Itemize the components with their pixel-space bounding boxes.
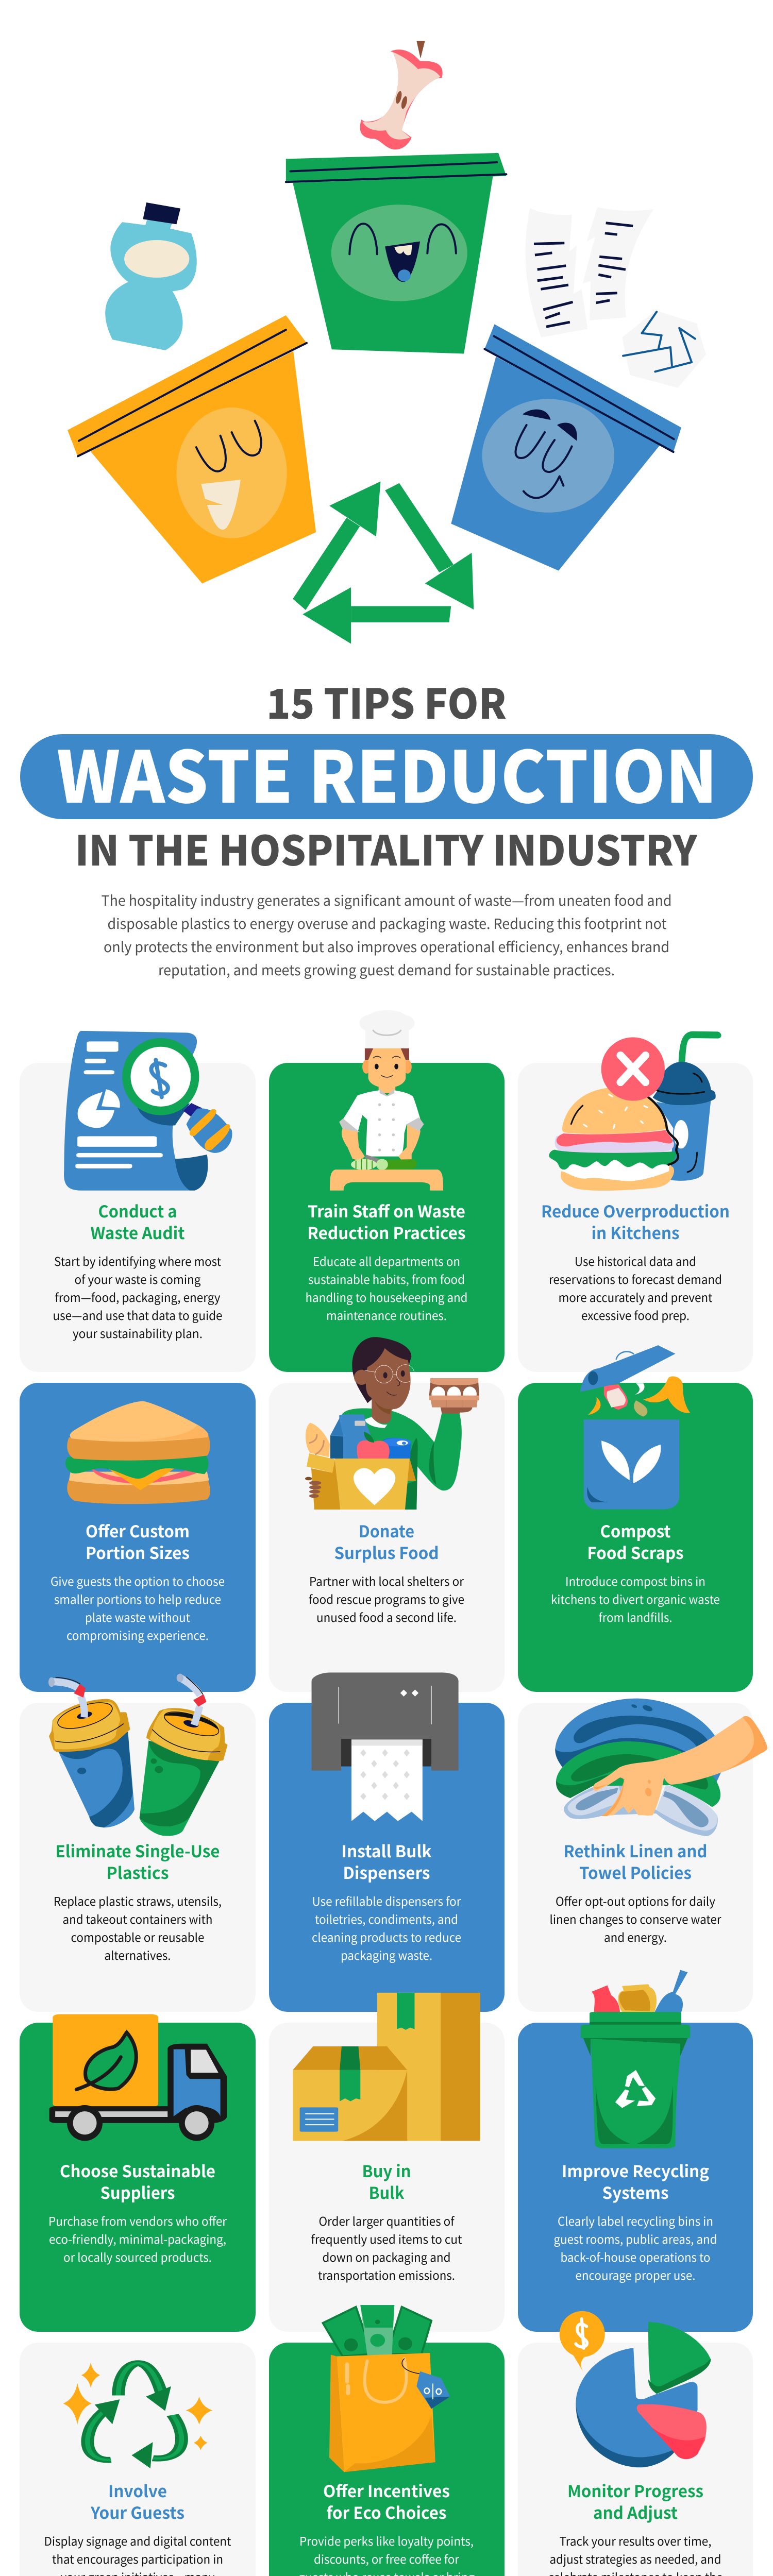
- panel: improve recycling systems: [518, 1970, 753, 2332]
- heading: [307, 1199, 466, 1244]
- panel: reduce overproduction in kitchens: [518, 1031, 753, 1372]
- text block: Use historical data and: [575, 1252, 696, 1269]
- text block: back-of-house operations to: [561, 2248, 710, 2265]
- text block: Purchase from vendors who offer: [48, 2212, 227, 2229]
- heading: Portion Sizes: [86, 1540, 190, 1564]
- panel: conduct a waste audit: [20, 1031, 256, 1372]
- heading: Dispensers: [343, 1860, 430, 1884]
- heading: Choose Sustainable: [60, 2159, 215, 2182]
- text block: from landfills.: [599, 1608, 672, 1625]
- text block: down on packaging and: [323, 2248, 450, 2265]
- heading: for Eco Choices: [327, 2500, 446, 2524]
- text block: excessive food prep.: [581, 1306, 690, 1324]
- panel: rethink linen and towel policies: [518, 1699, 767, 2012]
- icon: hand lifting folded towels: [555, 1699, 767, 1836]
- text block: of your waste is coming: [74, 1270, 201, 1287]
- text block: [44, 2532, 231, 2576]
- icon: audit report with magnifier: [64, 1031, 232, 1191]
- text block: Offer opt-out options for daily: [556, 1892, 715, 1909]
- text block: Give guests the option to choose: [51, 1572, 225, 1589]
- text block: Provide perks like loyalty points,: [299, 2532, 474, 2549]
- heading: [362, 2159, 411, 2204]
- icon: shopping bag with cash and discount tag: [323, 2305, 450, 2472]
- heading: Offer Custom: [86, 1519, 190, 1543]
- text block: [311, 2212, 462, 2283]
- icon: orange bin with smiling face: [68, 315, 316, 584]
- heading: [541, 1199, 730, 1244]
- text block: alternatives.: [104, 1946, 171, 1963]
- illustration: happy recycling bins hero: [68, 41, 706, 643]
- heading: in the hospitality industry: IN THE HOSPITALITY INDUSTRY: [75, 818, 698, 878]
- text block: guest rooms, public areas, and: [553, 2230, 717, 2247]
- heading: Improve Recycling: [562, 2159, 709, 2182]
- heading: Reduce Overproduction: [541, 1199, 730, 1223]
- text block: plate waste without: [85, 1608, 190, 1625]
- panel: monitor progress and adjust: [518, 2311, 753, 2576]
- heading: Systems: [602, 2180, 669, 2204]
- heading: Eliminate Single-Use: [56, 1839, 220, 1862]
- heading: Conduct a: [98, 1199, 177, 1223]
- panel: donate surplus food: [269, 1337, 505, 1692]
- icon: cleaning bottles: [592, 1970, 687, 2015]
- heading: Plastics: [106, 1860, 169, 1884]
- icon: two plastic cups with straws: [48, 1674, 228, 1836]
- heading: [86, 1519, 190, 1564]
- panel: install bulk dispensers: [269, 1672, 505, 2012]
- heading: and Adjust: [593, 2500, 678, 2524]
- intro text: The hospitality industry generates a significant amount of waste—from uneaten food and: [101, 889, 672, 910]
- icon: apple core: [360, 41, 443, 149]
- title: [20, 671, 753, 878]
- text block: adjust strategies as needed, and: [549, 2550, 721, 2567]
- text block: that encourages participation in: [52, 2550, 223, 2567]
- heading: Offer Incentives: [323, 2479, 450, 2502]
- banner: waste reduction: WASTE REDUCTION: [57, 720, 717, 823]
- text block: food rescue programs to give: [309, 1590, 464, 1607]
- text block: Display signage and digital content: [44, 2532, 231, 2549]
- icon: stacked cardboard boxes: [293, 1993, 480, 2141]
- icon: blue bin with winking face: [451, 324, 681, 571]
- text block: [298, 2532, 475, 2576]
- icon: recycling arrows: [293, 481, 474, 643]
- text block: cleaning products to reduce: [312, 1928, 461, 1945]
- heading: [587, 1519, 683, 1564]
- text block: sustainable habits, from food: [308, 1270, 465, 1287]
- text block: encourage proper use.: [575, 2266, 696, 2283]
- text block: Replace plastic straws, utensils,: [54, 1892, 222, 1909]
- text block: Use refillable dispensers for: [312, 1892, 461, 1909]
- text block: from—food, packaging, energy: [55, 1288, 221, 1306]
- heading: Reduction Practices: [307, 1221, 466, 1244]
- text block: [51, 1572, 225, 1643]
- text block: [54, 1892, 222, 1963]
- text block: and energy.: [604, 1928, 667, 1945]
- panel: offer incentives for eco choices: [269, 2305, 505, 2576]
- icon: burger and soda with cross: [549, 1031, 721, 1191]
- heading: [562, 2159, 709, 2204]
- text block: or locally sourced products.: [63, 2248, 212, 2265]
- text block: and takeout containers with: [63, 1910, 212, 1927]
- text block: compromising experience.: [66, 1626, 209, 1643]
- text block: kitchens to divert organic waste: [551, 1590, 720, 1607]
- text block: Track your results over time,: [560, 2532, 711, 2549]
- icon: woman holding donation box and eggs: [305, 1337, 479, 1510]
- intro text: [101, 889, 672, 979]
- text block: [48, 2212, 227, 2265]
- heading: Your Guests: [90, 2500, 184, 2524]
- heading: Towel Policies: [579, 1860, 692, 1884]
- text block: compostable or reusable: [71, 1928, 204, 1945]
- text block: transportation emissions.: [318, 2266, 455, 2283]
- text block: smaller portions to help reduce: [54, 1590, 221, 1607]
- panel: eliminate single-use plastics: [20, 1674, 256, 2012]
- panel: choose sustainable suppliers: [20, 2014, 256, 2332]
- heading: [341, 1839, 432, 1884]
- heading: Donate: [359, 1519, 414, 1543]
- icon: delivery truck with leaf: [49, 2014, 227, 2141]
- text block: your sustainability plan.: [73, 1324, 203, 1342]
- text block: packaging waste.: [341, 1946, 432, 1963]
- heading: [334, 1519, 439, 1564]
- heading: Buy in: [362, 2159, 411, 2182]
- panel: compost food scraps: [518, 1345, 753, 1692]
- heading: Food Scraps: [587, 1540, 683, 1564]
- text block: linen changes to conserve water: [549, 1910, 721, 1927]
- text block: [53, 1252, 223, 1342]
- panel: train staff on waste reduction practices: [269, 1010, 505, 1372]
- text block: more accurately and prevent: [559, 1288, 713, 1306]
- icon: green recycling bin: [581, 2012, 690, 2148]
- heading: [567, 2479, 703, 2524]
- heading: Involve: [108, 2479, 167, 2502]
- icon: plastic bottle: [105, 202, 197, 350]
- icon: torn paper scraps: [526, 207, 706, 388]
- text block: unused food a second life.: [316, 1608, 457, 1625]
- heading: Suppliers: [100, 2180, 175, 2204]
- text block: frequently used items to cut: [311, 2230, 462, 2247]
- text block: discounts, or free coffee for: [314, 2550, 459, 2567]
- text block: eco-friendly, minimal-packaging,: [49, 2230, 226, 2247]
- text block: toiletries, condiments, and: [315, 1910, 458, 1927]
- heading: Rethink Linen and: [564, 1839, 707, 1862]
- text block: reservations to forecast demand: [549, 1270, 722, 1287]
- text block: [553, 2212, 717, 2283]
- text block: [549, 1892, 721, 1945]
- text block: Start by identifying where most: [54, 1252, 221, 1269]
- panel: offer custom portion sizes: [20, 1383, 256, 1692]
- heading: Compost: [600, 1519, 671, 1543]
- text block: maintenance routines.: [326, 1306, 447, 1324]
- intro text: disposable plastics to energy overuse and packaging waste. Reducing this footprint not: [107, 912, 667, 933]
- icon: paper towel dispenser: [312, 1672, 459, 1821]
- icon: recycling symbol with sparkles: [63, 2363, 212, 2468]
- text block: Order larger quantities of: [318, 2212, 455, 2229]
- heading: [60, 2159, 215, 2204]
- heading: Surplus Food: [334, 1540, 439, 1564]
- heading: Waste Audit: [91, 1221, 184, 1244]
- heading: 15 tips for: 15 TIPS FOR: [266, 671, 507, 731]
- panel: buy in bulk: [269, 1993, 505, 2332]
- heading: in Kitchens: [592, 1221, 679, 1244]
- intro text: only protects the environment but also improves operational efficiency, enhances brand: [104, 936, 669, 956]
- text block: Educate all departments on: [313, 1252, 460, 1269]
- icon: green bin with laughing face: [286, 153, 506, 353]
- text block: [312, 1892, 461, 1963]
- text block: [309, 1572, 464, 1625]
- icon: compost bin with food scraps: [580, 1345, 690, 1509]
- text block: [549, 1252, 722, 1324]
- text block: Partner with local shelters or: [309, 1572, 464, 1589]
- heading: Bulk: [369, 2180, 405, 2204]
- icon: pie chart with coin bubble: [560, 2311, 711, 2467]
- heading: [91, 1199, 184, 1244]
- icon: chef cutting cucumber: [330, 1010, 443, 1191]
- heading: Install Bulk: [341, 1839, 432, 1862]
- heading: [323, 2479, 450, 2524]
- heading: [90, 2479, 184, 2524]
- text block: handling to housekeeping and: [305, 1288, 468, 1306]
- panel: involve your guests: [20, 2343, 256, 2576]
- text block: [551, 1572, 720, 1625]
- intro text: reputation, and meets growing guest demand for sustainable practices.: [158, 959, 615, 979]
- heading: [56, 1839, 220, 1884]
- text block: [548, 2532, 722, 2576]
- heading: Monitor Progress: [567, 2479, 703, 2502]
- text block: Introduce compost bins in: [565, 1572, 705, 1589]
- heading: Train Staff on Waste: [308, 1199, 465, 1223]
- text block: [305, 1252, 468, 1324]
- icon: sandwich: [65, 1401, 210, 1504]
- text block: use—and use that data to guide: [53, 1306, 223, 1324]
- text block: Clearly label recycling bins in: [558, 2212, 713, 2229]
- heading: [564, 1839, 707, 1884]
